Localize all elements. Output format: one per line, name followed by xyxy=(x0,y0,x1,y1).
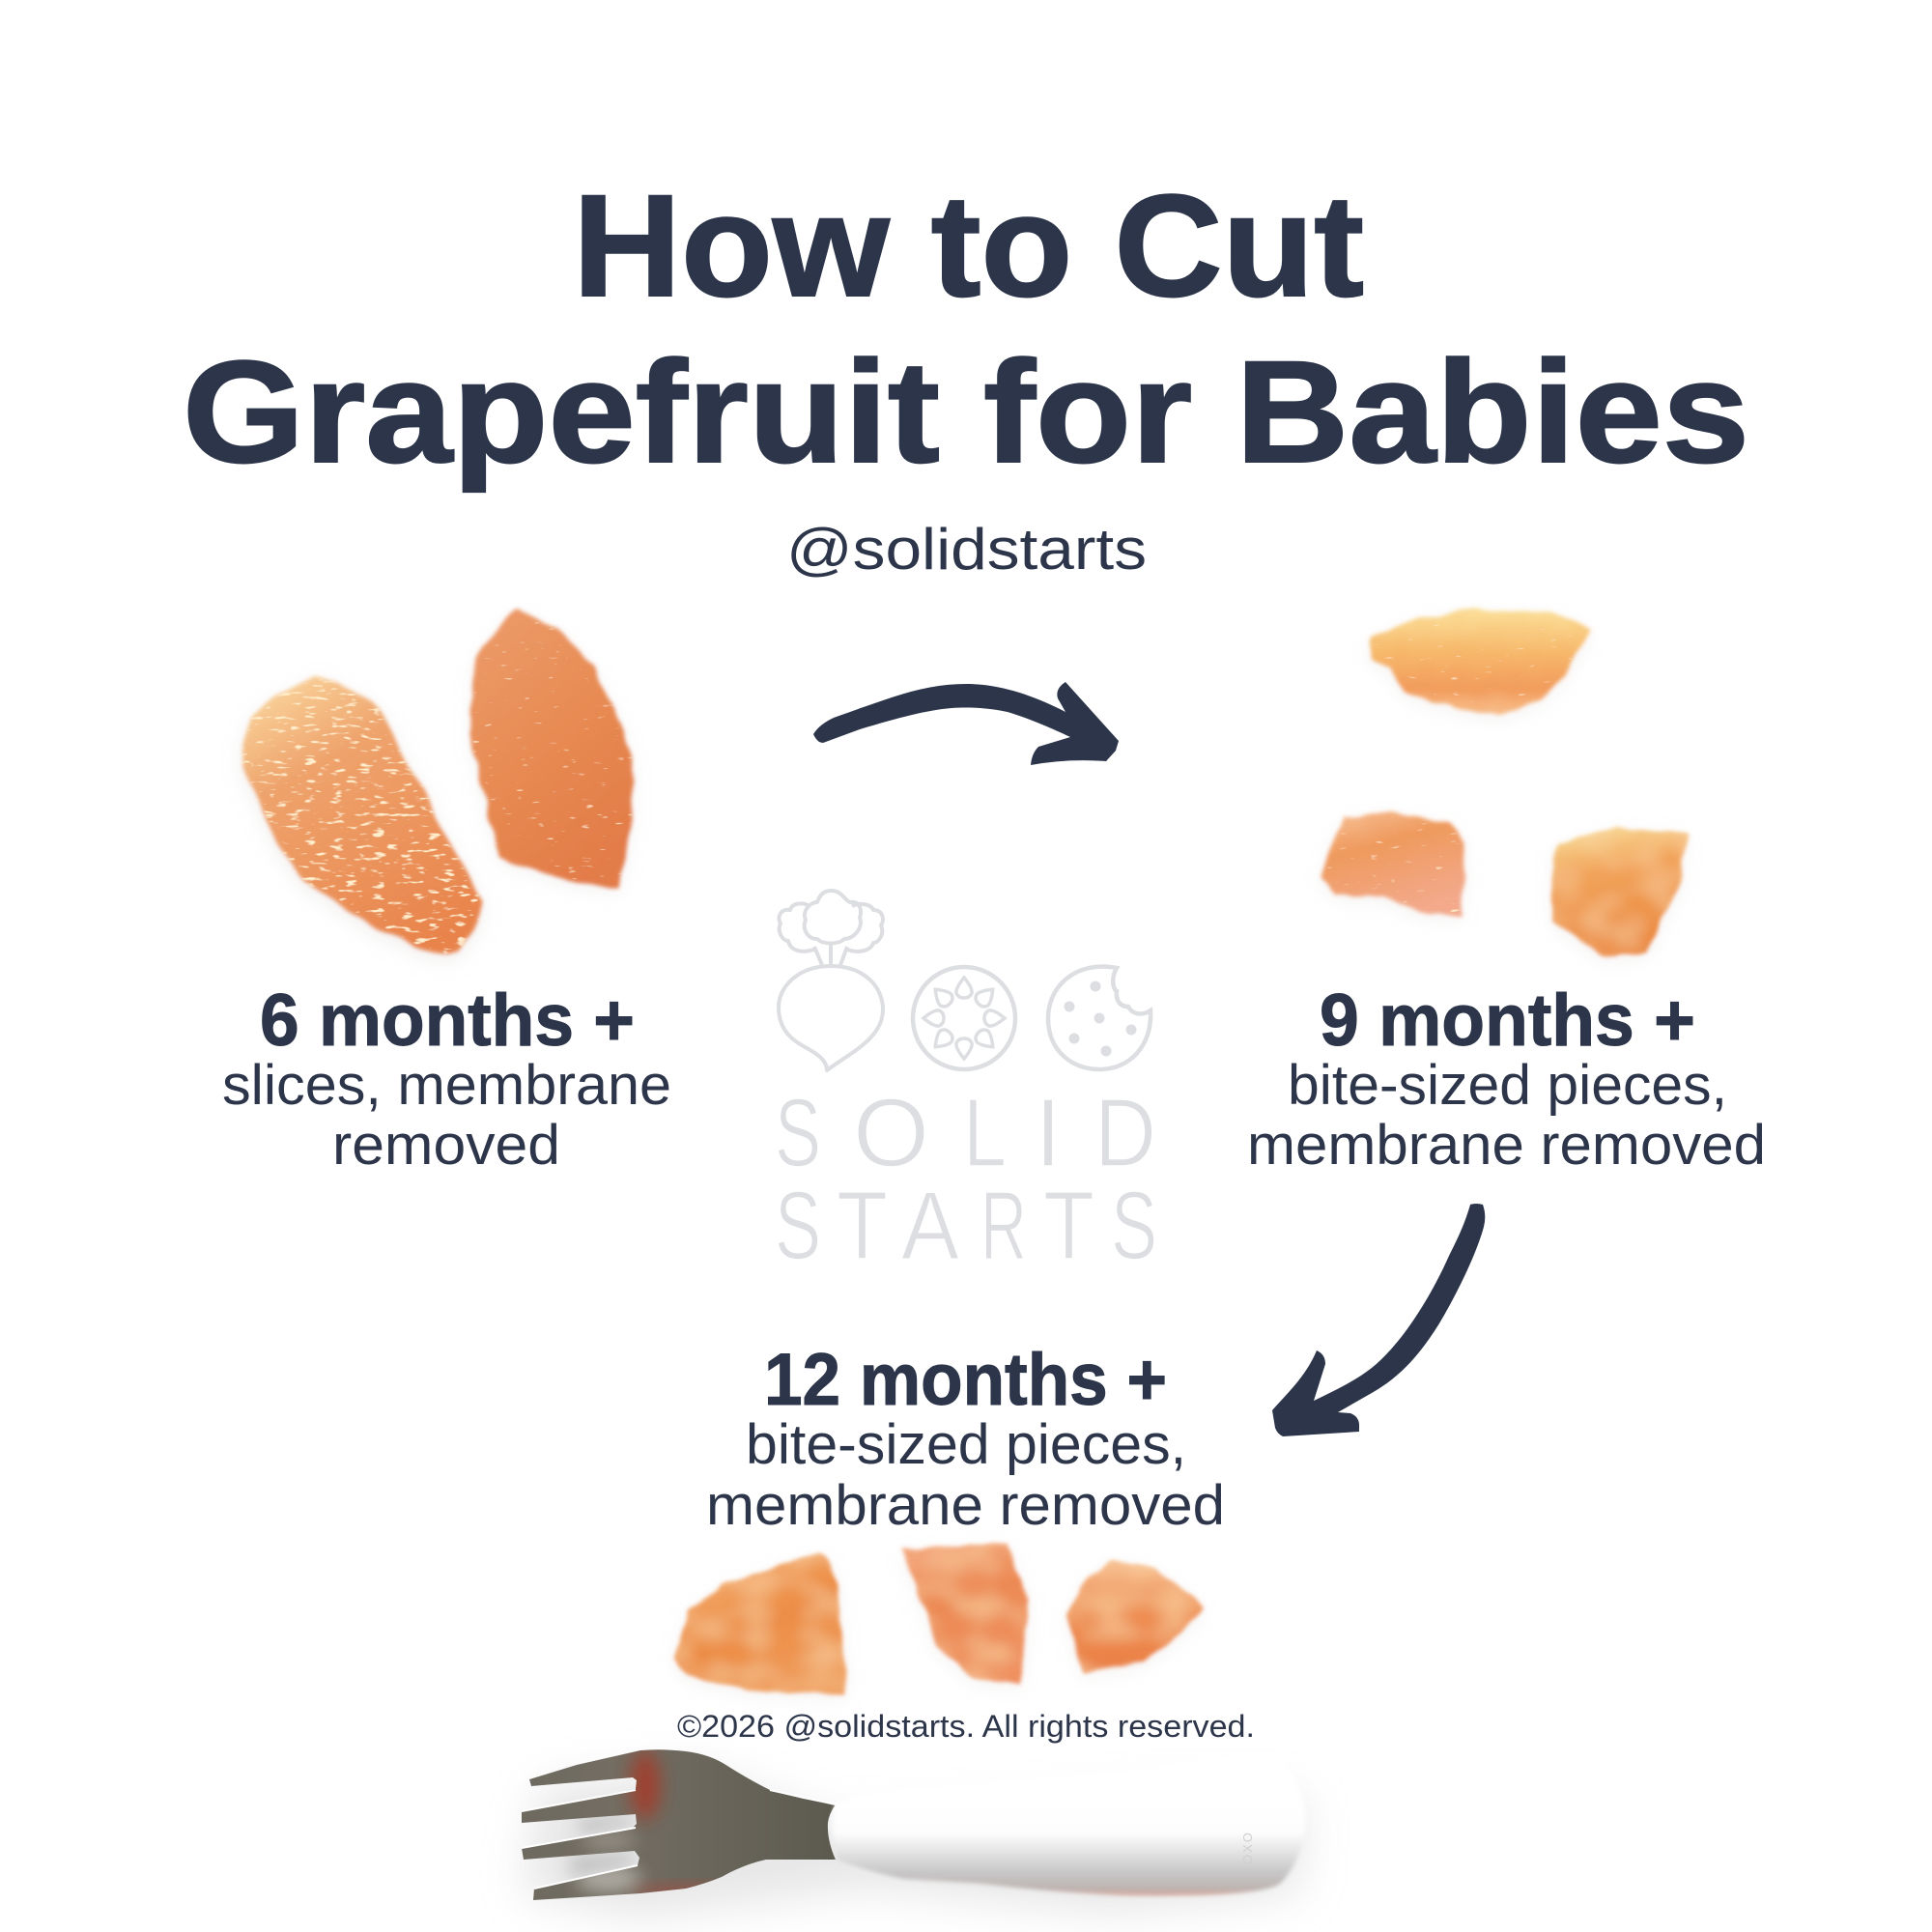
logo wordmark: A xyxy=(901,1172,959,1280)
logo wordmark: S xyxy=(775,1172,821,1280)
photo: 12 month grapefruit pieces xyxy=(674,1544,1205,1693)
label: 12 months xyxy=(706,1339,1225,1537)
label: 6 months xyxy=(222,980,671,1177)
handle text: @solidstarts xyxy=(786,517,1147,582)
fork metal head xyxy=(522,1749,836,1900)
label: 12 months: membrane removed xyxy=(706,1474,1225,1537)
logo wordmark: S xyxy=(1111,1172,1157,1280)
logo wordmark: T xyxy=(837,1172,888,1280)
copyright: ©2026 @solidstarts. All rights reserved. xyxy=(677,1709,1255,1744)
arrow: to 9 months xyxy=(813,682,1119,765)
fork shadow xyxy=(522,1768,1304,1918)
left slice xyxy=(242,676,483,952)
handle brand mark: OXO xyxy=(1240,1831,1255,1864)
logo wordmark: O xyxy=(853,1079,929,1187)
logo wordmark: D xyxy=(1094,1079,1156,1187)
logo wordmark xyxy=(775,1079,1157,1280)
label: 9 months: bite-sized pieces, xyxy=(1288,1054,1727,1117)
logo wordmark: I xyxy=(1035,1079,1062,1187)
photo: 6 month grapefruit slices xyxy=(242,611,633,952)
label: 12 months: 12 months + xyxy=(764,1339,1167,1421)
right bite piece xyxy=(1552,828,1688,956)
icon: cookie xyxy=(1048,967,1151,1069)
gap shadows between tines xyxy=(570,1816,633,1879)
title: Grapefruit for Babies xyxy=(183,330,1749,493)
logo wordmark: S xyxy=(775,1079,821,1187)
arrow: to 12 months xyxy=(1272,1204,1485,1436)
photo: baby fork xyxy=(512,1739,1306,1918)
label: 9 months: 9 months + xyxy=(1320,980,1695,1062)
fork handle xyxy=(833,1755,1306,1895)
label: 9 months: membrane removed xyxy=(1247,1114,1766,1177)
tine highlights xyxy=(522,1790,836,1889)
piece two xyxy=(901,1544,1029,1684)
photo: 9 month grapefruit pieces xyxy=(1321,609,1688,956)
piece three xyxy=(1065,1560,1205,1671)
Solid Starts watermark logo xyxy=(775,891,1157,1280)
label: 6 months: 6 months + xyxy=(260,980,635,1062)
label: 12 months: bite-sized pieces, xyxy=(746,1413,1186,1476)
right slice xyxy=(470,611,633,889)
icon: radish xyxy=(779,891,883,1070)
icon: tomato slice xyxy=(913,967,1015,1069)
logo wordmark: T xyxy=(1043,1172,1094,1280)
piece one xyxy=(674,1553,846,1693)
label: 6 months: removed xyxy=(332,1114,560,1177)
title xyxy=(183,164,1749,493)
logo wordmark: L xyxy=(963,1079,1007,1187)
long piece xyxy=(1370,609,1591,715)
left bite piece xyxy=(1321,811,1465,918)
logo wordmark: R xyxy=(980,1172,1027,1280)
label: 6 months: slices, membrane xyxy=(222,1054,671,1117)
label: 9 months xyxy=(1247,980,1766,1177)
title: How to Cut xyxy=(573,164,1364,327)
